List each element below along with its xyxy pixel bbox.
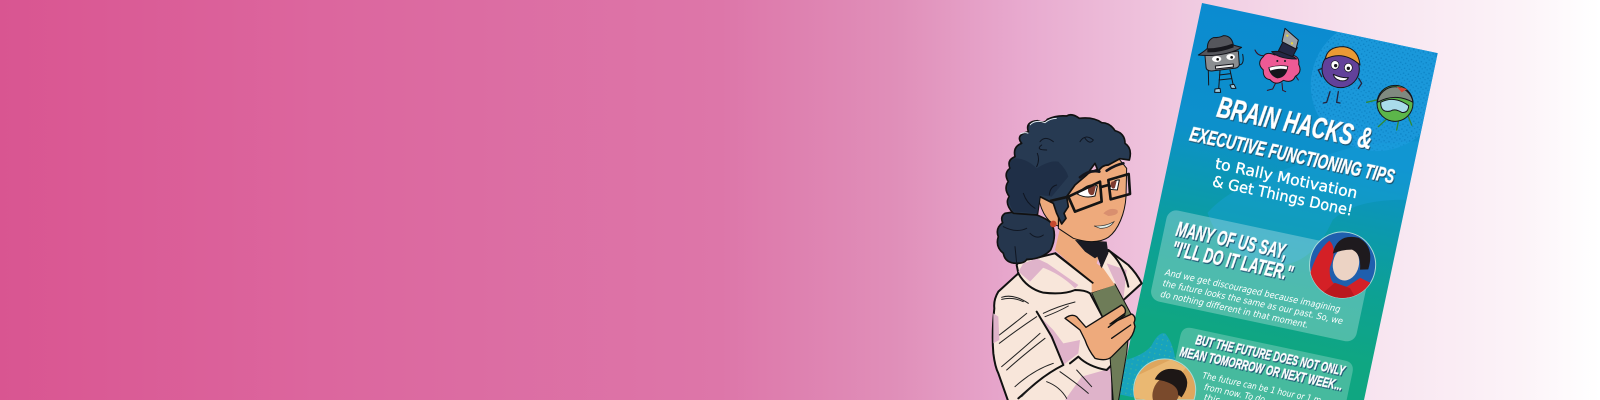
glasses	[1050, 174, 1130, 212]
panel heading: MANY OF US SAY,	[1174, 218, 1289, 264]
neck shadow and strap	[1075, 240, 1108, 268]
panel background	[1167, 326, 1355, 400]
panel background	[1149, 209, 1374, 343]
subtitle: to Rally Motivation	[1214, 154, 1359, 202]
subtitle: & Get Things Done!	[1211, 172, 1354, 220]
hair bun	[997, 212, 1054, 263]
title line 2: EXECUTIVE FUNCTIONING TIPS	[1188, 124, 1397, 189]
title block	[1188, 86, 1405, 189]
jacket	[993, 250, 1142, 400]
panel heading: BUT THE FUTURE DOES NOT ONLY	[1194, 331, 1347, 379]
green shirt	[1092, 284, 1131, 400]
character: pink brain with hat	[1255, 28, 1300, 92]
avatar: smiling person	[1133, 358, 1196, 400]
neck	[1055, 228, 1115, 293]
panel heading	[1170, 218, 1300, 286]
jacket shadows	[993, 258, 1127, 400]
ear and earring	[1038, 196, 1058, 227]
character: woman with curly hair and glasses	[993, 115, 1142, 400]
title line 1: BRAIN HACKS &	[1214, 91, 1376, 156]
hand	[1065, 305, 1135, 360]
panel: many of us say	[1151, 210, 1376, 342]
panel body text	[1159, 268, 1346, 338]
panel body text: the future looks the same as our past. So, we	[1162, 279, 1344, 327]
finger creases	[1108, 315, 1131, 338]
panel: the future	[1133, 328, 1353, 400]
character: grey robot with fedora	[1198, 36, 1243, 92]
hair shadow	[1007, 158, 1068, 213]
hair shine	[1020, 118, 1057, 134]
character: purple blob with orange beanie	[1318, 47, 1362, 103]
blue textured blobs	[1120, 32, 1437, 398]
mouth	[1094, 222, 1114, 228]
avatar: person in red hoodie	[1309, 231, 1376, 298]
eyebrows	[1080, 163, 1123, 177]
irises	[1088, 181, 1117, 195]
jacket seams	[1018, 250, 1128, 400]
poster: brain hacks infographic	[1117, 0, 1455, 400]
hair curls and highlights	[1003, 137, 1093, 263]
collar edge	[1055, 253, 1093, 283]
panel body text: And we get discouraged because imagining	[1163, 268, 1341, 315]
face	[1058, 159, 1127, 242]
eyes	[1077, 180, 1119, 197]
mascots row	[1198, 28, 1413, 130]
jacket folds	[999, 296, 1092, 398]
character: green ball with goggles and helmet	[1367, 85, 1413, 130]
poster background	[1118, 3, 1438, 400]
panel heading	[1178, 329, 1347, 393]
hair top	[1006, 115, 1130, 224]
panel heading: "I'LL DO IT LATER."	[1170, 237, 1296, 286]
panel body text: do nothing different in that moment.	[1159, 290, 1309, 331]
nose shading	[1103, 209, 1118, 216]
